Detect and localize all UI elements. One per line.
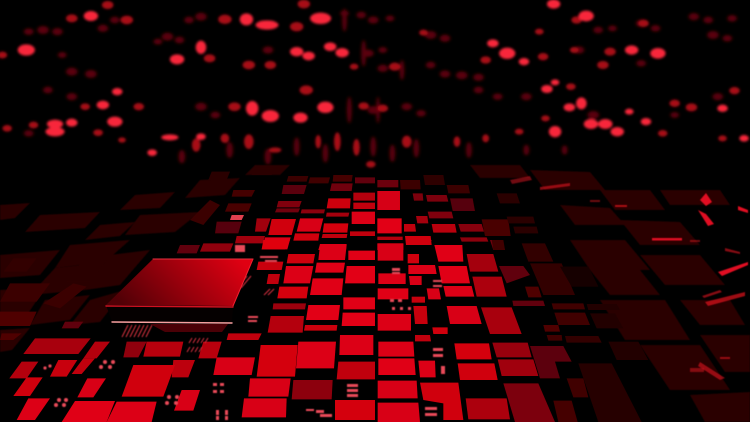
dim far board tiles xyxy=(0,165,750,422)
chip edge highlights xyxy=(106,259,253,323)
medium bokeh lights xyxy=(0,0,740,168)
chip top surface xyxy=(106,259,253,306)
background bokeh lights xyxy=(0,0,749,168)
chip shadow side xyxy=(106,305,233,322)
right side trace highlights xyxy=(510,176,748,380)
circuit tiles: lower left board xyxy=(0,240,375,422)
bright bokeh lights xyxy=(18,0,749,156)
solder pads xyxy=(43,245,445,420)
chip underside glow xyxy=(150,324,228,332)
solder pads and chip pins xyxy=(43,245,445,420)
chip pins xyxy=(122,276,274,352)
circuit tiles: upper middle board xyxy=(190,168,538,250)
circuit tiles: lower right board xyxy=(378,240,648,422)
dim bokeh haze xyxy=(24,8,737,165)
microchip xyxy=(106,259,253,332)
